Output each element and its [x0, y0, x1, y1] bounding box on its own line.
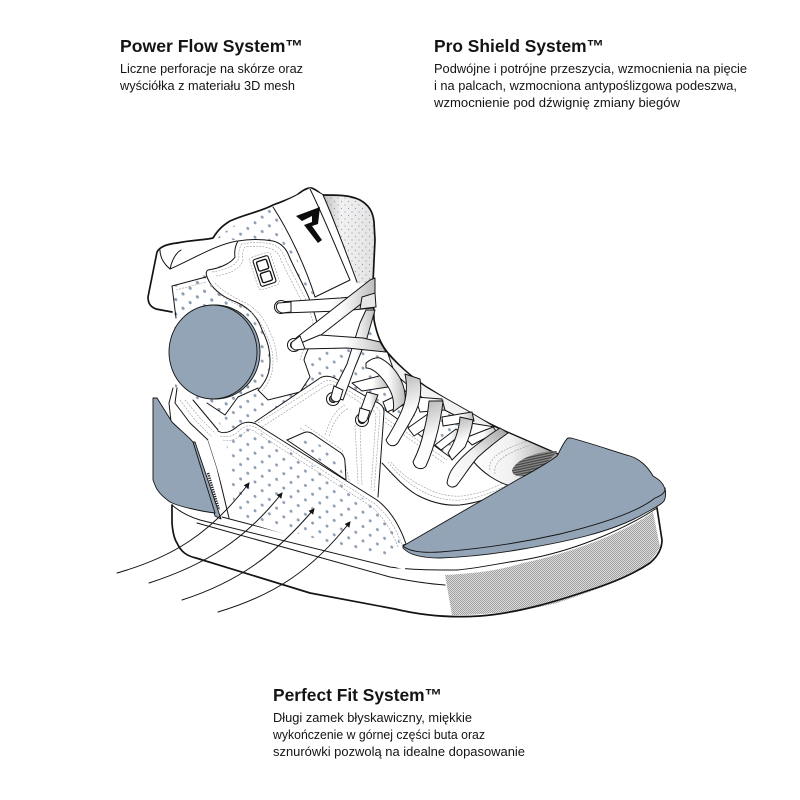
back collar panel [323, 195, 375, 284]
zipper [208, 473, 219, 510]
text block: Perfect Fit System: sznurówki pozwolą na idealne dopasowanie [273, 745, 525, 759]
text block: Pro Shield System [433, 36, 747, 110]
text block: Perfect Fit System: wykończenie w górnej części buta oraz [272, 728, 485, 742]
blue toe protector [403, 438, 666, 558]
text block: Perfect Fit System: Długi zamek błyskawiczny, miękkie [273, 711, 472, 725]
ankle panel with stitching [206, 240, 317, 400]
text block: Pro Shield System: Podwójne i potrójne przeszycia, wzmocnienia na pięcie [434, 62, 747, 76]
icon: digit badge [249, 251, 280, 291]
pull loop [148, 241, 237, 312]
text block: Perfect Fit System: Perfect Fit System™ [273, 685, 442, 705]
text block: Perfect Fit System [272, 685, 525, 759]
text block: Pro Shield System: i na palcach, wzmocniona antypoślizgowa podeszwa, [434, 79, 737, 93]
hatched toe-flex area [512, 451, 557, 476]
sole dither texture [445, 512, 660, 615]
illustration: shoe [117, 188, 666, 617]
rear ankle perforated panel [172, 277, 262, 518]
blue ankle protector disc [169, 305, 260, 399]
arrows: airflow [117, 483, 350, 612]
forefoot panels [382, 410, 510, 505]
small perforated insert [287, 432, 346, 480]
tongue strip with logo [273, 188, 357, 297]
text block: Power Flow System: Liczne perforacje na skórze oraz [120, 62, 303, 76]
icon: Rebelhorn logo [296, 207, 322, 243]
text block: Pro Shield System: wzmocnienie pod dźwignię zmiany biegów [433, 96, 681, 110]
shoe upper silhouette [148, 188, 560, 560]
text block: Pro Shield System: Pro Shield System™ [434, 36, 604, 56]
vamp with gradient [473, 432, 560, 487]
tongue cross straps [352, 354, 497, 450]
sole [172, 505, 662, 617]
text block: Power Flow System: Power Flow System™ [120, 36, 303, 56]
mid overlay panels [255, 376, 384, 497]
text block: Power Flow System: wyściółka z materiału 3D mesh [119, 79, 295, 93]
text block: Power Flow System [119, 36, 303, 93]
blue heel protector [153, 398, 221, 519]
perforated upper areas [172, 208, 480, 457]
laces [279, 278, 508, 487]
side perforated panel [208, 422, 407, 570]
eyelets [274, 300, 370, 426]
